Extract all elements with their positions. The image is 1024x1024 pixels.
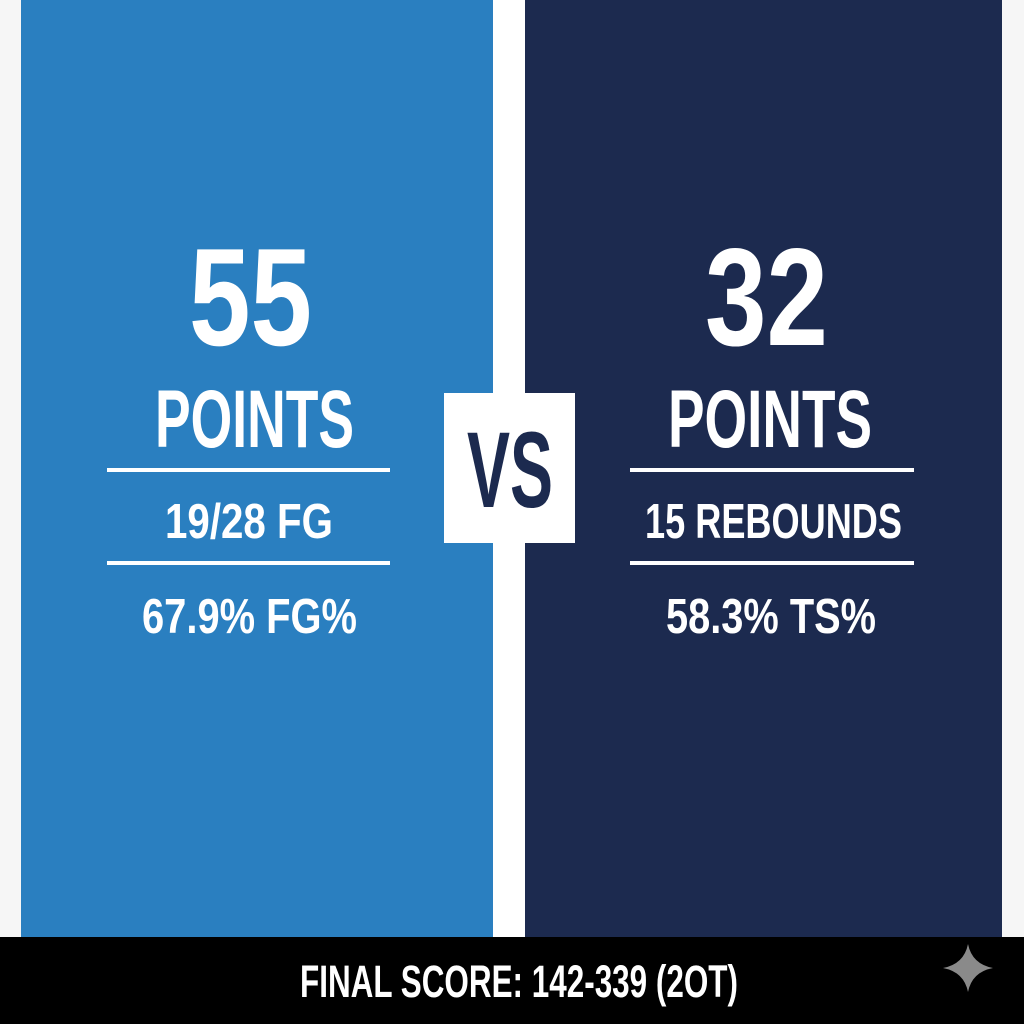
left label points: POINTS (155, 374, 354, 465)
vs badge: VS (467, 409, 553, 530)
left stat: field goals: 19/28 FG (165, 495, 333, 549)
right label points: POINTS (668, 374, 872, 465)
panel: right player (525, 0, 1002, 937)
icon: sparkle (943, 944, 993, 992)
footer: final score bar (0, 937, 1024, 1024)
left big number: 55 (189, 220, 312, 375)
right stat: true shooting: 58.3% TS% (666, 590, 876, 644)
footer: final score bar: FINAL SCORE: 142-339 (2OT) (300, 956, 738, 1007)
right big number: 32 (705, 220, 828, 375)
left stat: fg percentage: 67.9% FG% (142, 590, 357, 644)
panel: left player (21, 0, 493, 937)
vs badge (444, 393, 575, 543)
right stat: rebounds: 15 REBOUNDS (645, 495, 902, 549)
